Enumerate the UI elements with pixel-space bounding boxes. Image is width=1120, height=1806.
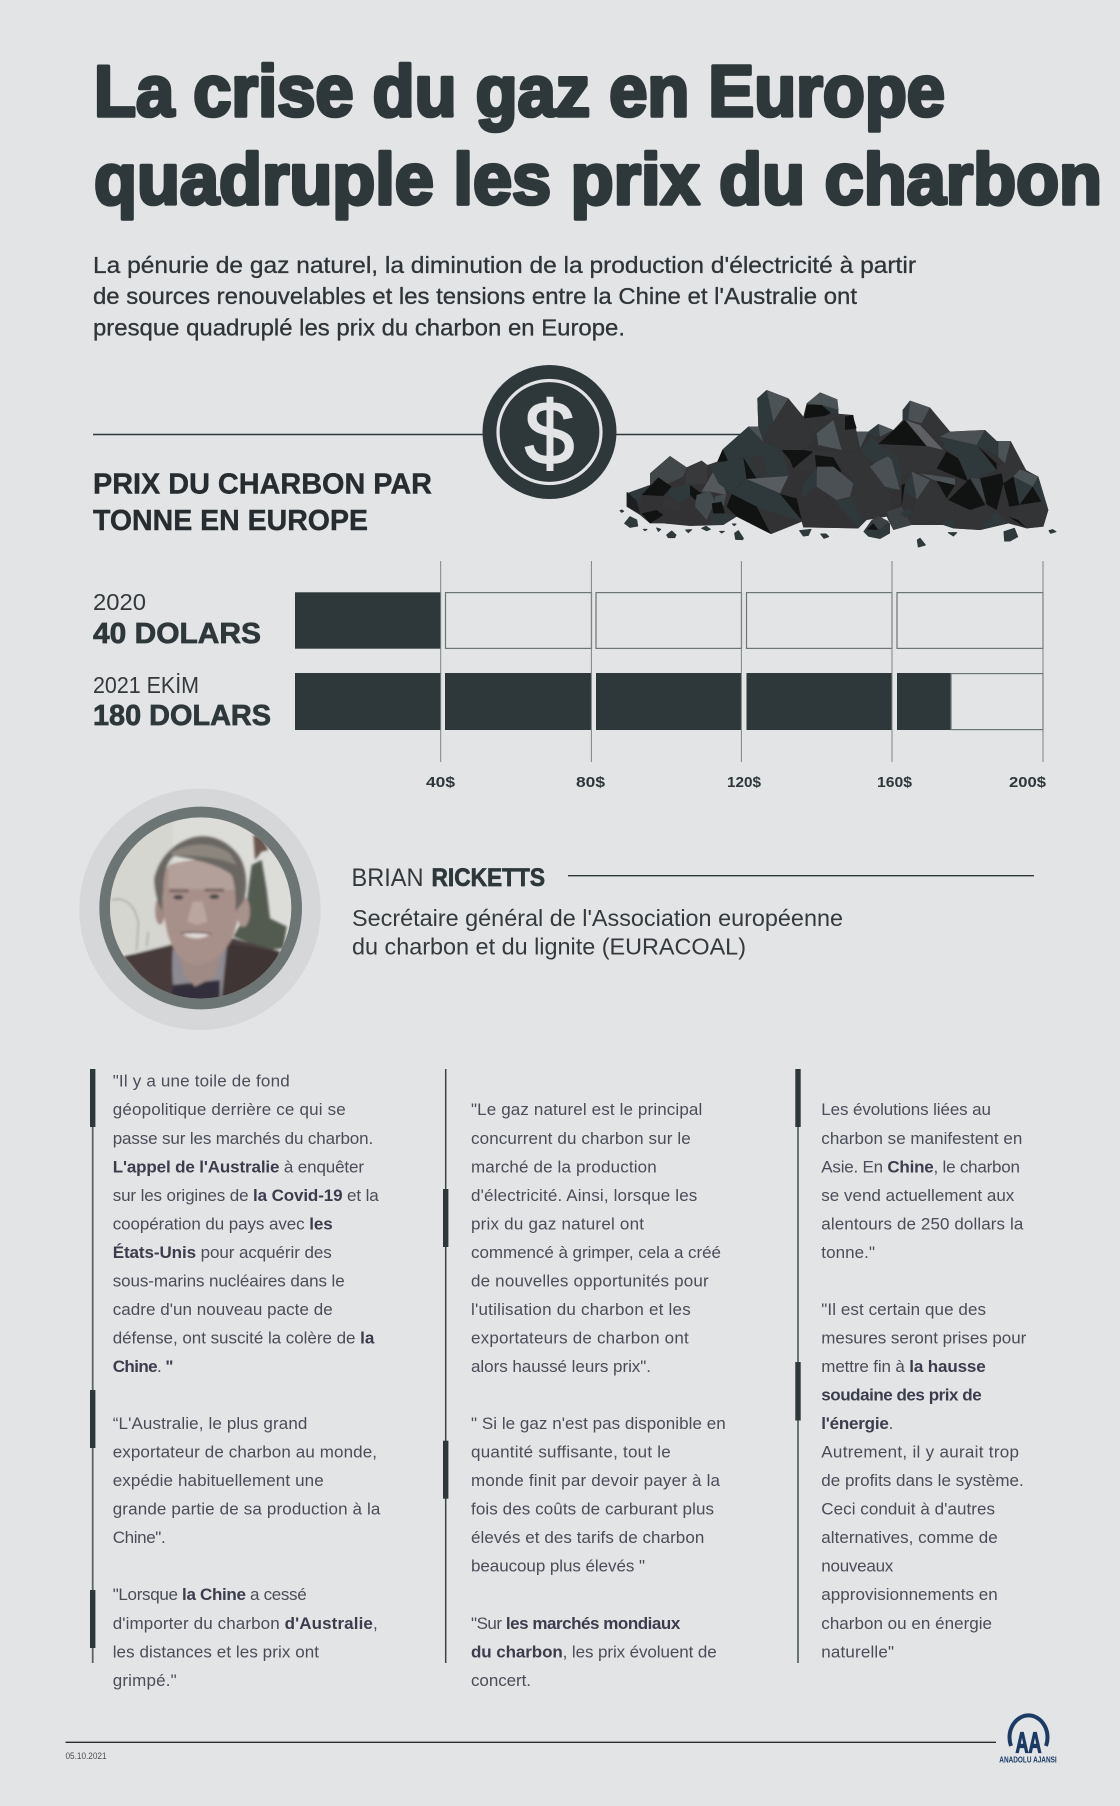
axis labels: 80$ — [576, 774, 606, 791]
quote: geopolitical backdrop: "Il y a une toile de fond — [113, 1072, 290, 1091]
quote: geopolitical backdrop: défense, ont suscité la colère de la — [113, 1328, 375, 1348]
role description: Secrétaire général de l'Association européenne — [352, 905, 843, 931]
quote: gas as competitor: l'utilisation du charbon et les — [471, 1300, 691, 1319]
intro text: de sources renouvelables et les tensions entre la Chine et l'Australie ont — [93, 283, 858, 309]
bar: 2021 value — [295, 673, 1043, 730]
quote: gas availability: élevés et des tarifs de charbon — [471, 1528, 704, 1547]
column 3 — [795, 1069, 1027, 1663]
quote: measures to end the rise: soudaine des prix de — [821, 1386, 982, 1404]
quote: gas availability: quantité suffisante, tout le — [471, 1443, 671, 1462]
quote: gas availability: " Si le gaz n'est pas disponible en — [471, 1414, 726, 1433]
quote: gas as competitor: de nouvelles opportunités pour — [471, 1271, 709, 1290]
quote: China stopped imports: d'importer du charbon d'Australie, — [113, 1614, 378, 1633]
quote: geopolitical backdrop: géopolitique derrière ce qui se — [113, 1100, 346, 1119]
quote: gas as competitor: "Le gaz naturel est le principal — [471, 1100, 702, 1119]
quote: gas as competitor: d'électricité. Ainsi, lorsque les — [471, 1186, 697, 1205]
intro text: presque quadruplé les prix du charbon en Europe. — [93, 314, 625, 340]
quote: measures to end the rise — [821, 1300, 1027, 1661]
row label: 2021: 2021 EKİM — [93, 672, 199, 698]
bar chart: coal price — [93, 561, 1047, 791]
quote: gas as competitor: exportateurs de charbon ont — [471, 1328, 689, 1348]
heading: coal price per tonne: PRIX DU CHARBON PAR — [93, 468, 432, 500]
icon: coal pile — [620, 390, 1056, 547]
quote: China stopped imports — [113, 1585, 378, 1690]
column rule 3 — [795, 1069, 801, 1663]
role description: du charbon et du lignite (EURACOAL) — [352, 933, 746, 959]
quote: developments in Asia: tonne." — [821, 1243, 875, 1262]
quote: world markets: "Sur les marchés mondiaux — [471, 1614, 681, 1633]
quote: gas availability: fois des coûts de carburant plus — [471, 1500, 714, 1519]
logo: Anadolu Ajansi — [999, 1715, 1057, 1765]
name: Brian Ricketts: BRIAN — [352, 864, 424, 892]
quote: gas as competitor: commencé à grimper, cela a créé — [471, 1243, 721, 1262]
row label: 2020 — [93, 589, 261, 650]
axis labels: 200$ — [1009, 774, 1047, 791]
quote: China stopped imports: "Lorsque la Chine a cessé — [113, 1585, 307, 1604]
quote: gas as competitor: alors haussé leurs prix". — [471, 1357, 651, 1376]
quote: gas availability: monde finit par devoir payer à la — [471, 1471, 721, 1490]
title: quadruple les prix du charbon — [94, 140, 1102, 220]
quote: measures to end the rise: Autrement, il y aurait trop — [821, 1443, 1019, 1462]
column 2 — [443, 1069, 726, 1690]
quote: measures to end the rise: alternatives, comme de — [821, 1528, 998, 1547]
quote: largest exporter: Chine". — [113, 1528, 166, 1547]
quote: gas as competitor — [471, 1100, 721, 1376]
quote: measures to end the rise: mettre fin à la hausse — [821, 1357, 986, 1376]
row label: 2021: 180 DOLARS — [93, 700, 271, 732]
logo: Anadolu Ajansi: AA — [1016, 1728, 1042, 1760]
column 1 — [90, 1069, 381, 1690]
quote: measures to end the rise: de profits dans le système. — [821, 1471, 1024, 1490]
axis labels: 120$ — [727, 774, 762, 791]
bar: 2020 value — [295, 592, 1043, 649]
quote: largest exporter: grande partie de sa production à la — [113, 1500, 381, 1519]
quote: geopolitical backdrop: passe sur les marchés du charbon. — [113, 1129, 373, 1148]
quote: gas as competitor: marché de la production — [471, 1157, 657, 1176]
axis labels: 40$ — [426, 774, 456, 791]
quote: gas as competitor: prix du gaz naturel ont — [471, 1214, 644, 1233]
name: Brian Ricketts — [352, 864, 545, 892]
name: Brian Ricketts: RICKETTS — [432, 864, 545, 892]
quote: world markets: du charbon, les prix évoluent de — [471, 1642, 717, 1661]
quote: developments in Asia — [821, 1100, 1024, 1262]
quote: measures to end the rise: l'énergie. — [821, 1414, 893, 1433]
quote: developments in Asia: Les évolutions liées au — [821, 1100, 991, 1119]
quote: geopolitical backdrop: cadre d'un nouveau pacte de — [113, 1300, 333, 1319]
quote: measures to end the rise: Ceci conduit à d'autres — [821, 1500, 995, 1519]
axis labels — [426, 774, 1047, 791]
column rule 2 — [443, 1069, 448, 1663]
quote: largest exporter — [113, 1414, 381, 1547]
date: 05.10.2021 — [66, 1751, 106, 1762]
row label: 2020: 40 DOLARS — [93, 618, 261, 650]
quote: measures to end the rise: charbon ou en énergie — [821, 1614, 992, 1633]
quote: China stopped imports: les distances et les prix ont — [113, 1642, 319, 1661]
quote: gas as competitor: concurrent du charbon sur le — [471, 1129, 691, 1148]
quote: geopolitical backdrop: sous-marins nucléaires dans le — [113, 1271, 345, 1290]
quote: China stopped imports: grimpé." — [113, 1671, 177, 1690]
quote: largest exporter: expédie habituellement une — [113, 1471, 324, 1490]
role description — [352, 905, 843, 959]
quote: geopolitical backdrop: L'appel de l'Australie à enquêter — [113, 1157, 364, 1176]
quote: geopolitical backdrop: Chine. " — [113, 1357, 173, 1376]
title — [94, 52, 1102, 220]
icon: dollar coin — [482, 365, 616, 499]
quote: measures to end the rise: approvisionnements en — [821, 1585, 998, 1604]
quote: developments in Asia: Asie. En Chine, le charbon — [821, 1157, 1020, 1176]
axis labels: 160$ — [877, 774, 913, 791]
logo: Anadolu Ajansi: ANADOLU AJANSI — [999, 1756, 1057, 1765]
quote: measures to end the rise: mesures seront prises pour — [821, 1328, 1027, 1348]
row label: 2021 — [93, 672, 271, 732]
quote: geopolitical backdrop: États-Unis pour acquérir des — [113, 1243, 332, 1262]
quote: developments in Asia: se vend actuellement aux — [821, 1186, 1015, 1205]
heading: coal price per tonne: TONNE EN EUROPE — [93, 505, 368, 537]
quote: developments in Asia: charbon se manifestent en — [821, 1129, 1022, 1148]
quote: gas availability — [471, 1414, 726, 1576]
column rule 1 — [90, 1069, 95, 1663]
quote: measures to end the rise: naturelle" — [821, 1642, 894, 1661]
icon: dollar coin: $ — [524, 384, 575, 484]
quote: geopolitical backdrop: coopération du pays avec les — [113, 1214, 333, 1233]
portrait: Brian Ricketts — [79, 789, 321, 1030]
row label: 2020: 2020 — [93, 589, 146, 615]
quote: gas availability: beaucoup plus élevés " — [471, 1557, 645, 1576]
quote: largest exporter: “L'Australie, le plus grand — [113, 1414, 307, 1433]
quote: developments in Asia: alentours de 250 dollars la — [821, 1214, 1024, 1233]
quote: geopolitical backdrop — [113, 1072, 379, 1376]
quote: world markets — [471, 1614, 717, 1690]
intro text: La pénurie de gaz naturel, la diminution de la production d'électricité à partir — [93, 252, 916, 278]
quote: world markets: concert. — [471, 1671, 531, 1690]
intro text — [93, 252, 916, 340]
quote: measures to end the rise: "Il est certain que des — [821, 1300, 986, 1319]
title: La crise du gaz en Europe — [94, 52, 945, 132]
quote: largest exporter: exportateur de charbon au monde, — [113, 1443, 377, 1462]
quote: measures to end the rise: nouveaux — [821, 1557, 894, 1576]
heading: coal price per tonne — [93, 468, 432, 537]
quote: geopolitical backdrop: sur les origines de la Covid-19 et la — [113, 1186, 379, 1205]
